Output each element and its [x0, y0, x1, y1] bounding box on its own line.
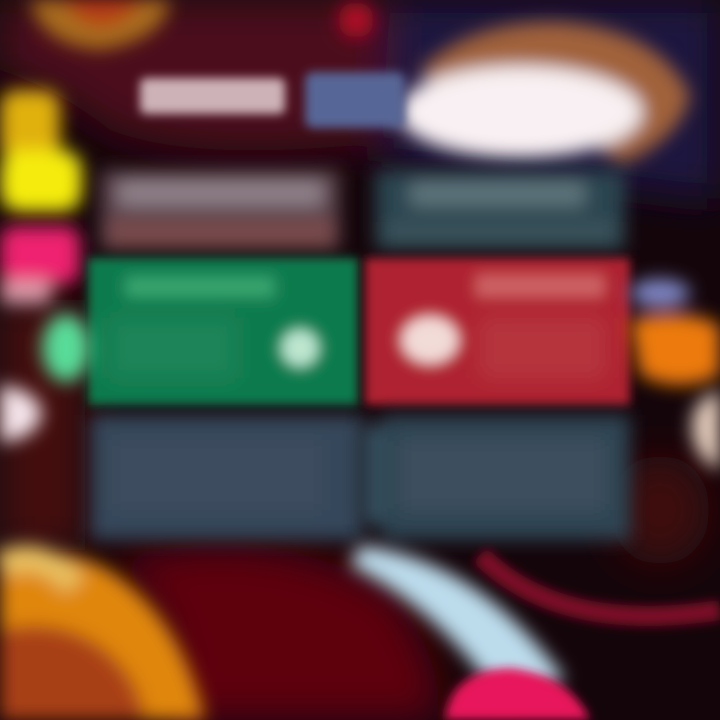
icon: red panel circle	[400, 315, 460, 365]
decorative shape: pink	[0, 226, 80, 304]
decorative shape: left white	[0, 385, 42, 442]
panel: left header	[100, 170, 340, 250]
decorative wheel: top left	[30, 0, 170, 50]
text block: green panel	[110, 318, 235, 378]
decorative shape: pink flower	[445, 668, 590, 720]
decorative wheel: bottom left	[0, 552, 205, 720]
text block: lower left	[112, 440, 322, 510]
heading: red panel	[475, 274, 605, 298]
decorative plate: top right	[398, 22, 690, 165]
text block: red panel	[480, 318, 605, 378]
decorative curve: maroon	[480, 555, 720, 616]
text block: lower right	[400, 440, 605, 510]
panel: lower left	[90, 415, 362, 540]
decorative shape: right orange	[630, 279, 720, 385]
icon: green panel circle	[280, 328, 320, 368]
title	[140, 72, 405, 128]
panel: red	[365, 258, 630, 405]
decorative shape: yellow	[0, 90, 82, 212]
decorative curve: light blue	[350, 545, 565, 700]
panel: green	[88, 258, 358, 405]
icon: mint circle	[42, 314, 90, 382]
panel: right header	[375, 170, 625, 250]
panel: lower right	[362, 415, 630, 540]
heading: green panel	[125, 276, 275, 298]
decorative shape: right white	[692, 390, 720, 470]
icon: red spot	[338, 2, 374, 38]
